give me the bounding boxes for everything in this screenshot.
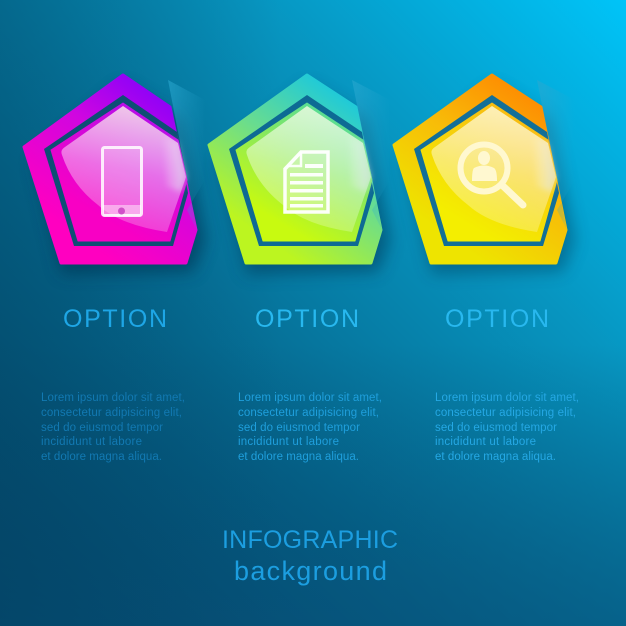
- text block: column 3: et dolore magna aliqua.: [435, 451, 556, 463]
- text block: column 2: consectetur adipisicing elit,: [238, 407, 379, 419]
- heading: option 3: OPTION: [445, 305, 549, 333]
- text block: column 3: sed do eiusmod tempor: [435, 422, 557, 434]
- text block: column 1: consectetur adipisicing elit,: [41, 407, 182, 419]
- panel: green pentagon with document icon: [209, 75, 390, 274]
- panel: magenta pentagon with phone icon: [24, 75, 205, 274]
- text block: column 2: incididunt ut labore: [238, 436, 339, 448]
- text block: column 3: Lorem ipsum dolor sit amet,: [435, 392, 579, 404]
- text block: column 1: incididunt ut labore: [41, 436, 142, 448]
- text block: column 2: sed do eiusmod tempor: [238, 422, 360, 434]
- title: background: [234, 556, 387, 586]
- icon: magnifier with person: [460, 144, 523, 205]
- text block: column 2: [238, 392, 382, 463]
- text block: column 1: et dolore magna aliqua.: [41, 451, 162, 463]
- title: INFOGRAPHIC: [222, 526, 398, 554]
- text block: column 2: Lorem ipsum dolor sit amet,: [238, 392, 382, 404]
- text block: column 2: et dolore magna aliqua.: [238, 451, 359, 463]
- heading: option 1: OPTION: [63, 305, 167, 333]
- icon: document: [285, 152, 328, 212]
- title: [222, 526, 398, 586]
- text block: column 3: [435, 392, 579, 463]
- text block: column 1: [41, 392, 185, 463]
- text block: column 3: consectetur adipisicing elit,: [435, 407, 576, 419]
- text block: column 1: sed do eiusmod tempor: [41, 422, 163, 434]
- text block: column 1: Lorem ipsum dolor sit amet,: [41, 392, 185, 404]
- heading: option 2: OPTION: [255, 305, 359, 333]
- text block: column 3: incididunt ut labore: [435, 436, 536, 448]
- panel: yellow pentagon with magnifier icon: [394, 75, 575, 274]
- icon: smartphone: [102, 148, 142, 216]
